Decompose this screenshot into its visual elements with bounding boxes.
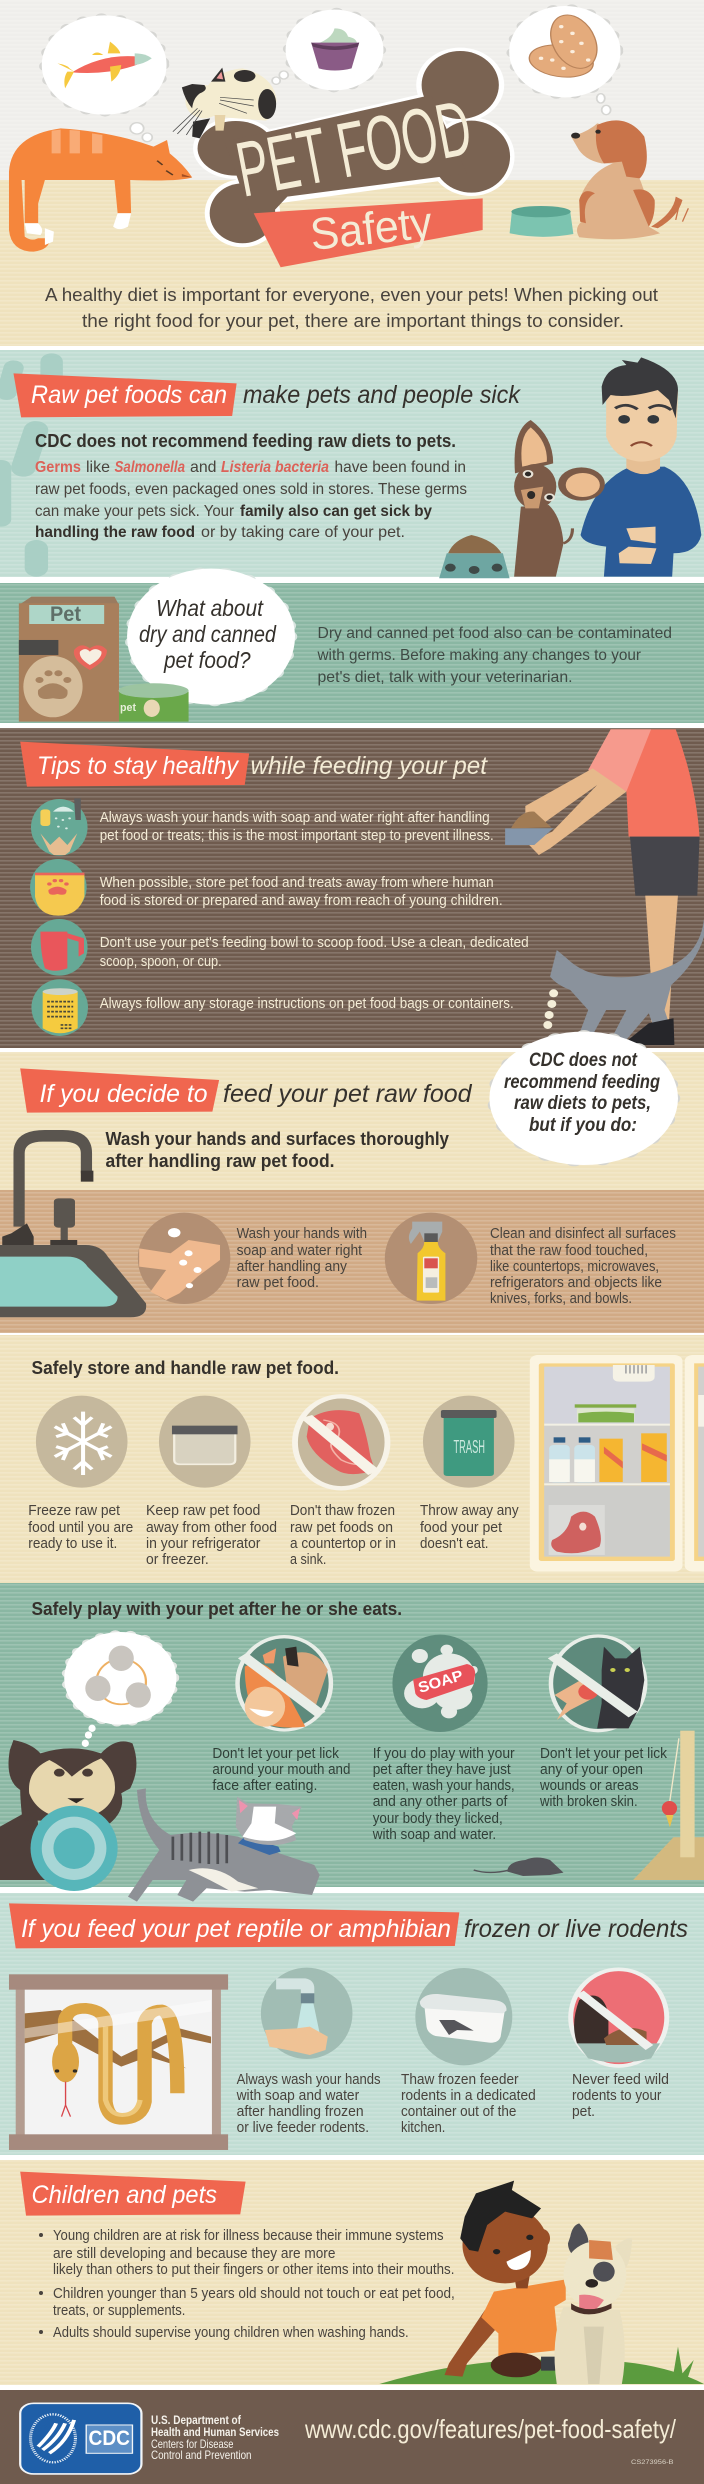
subheading: safely store: Safely store and handle raw pet food.	[32, 1358, 339, 1378]
text block: store tips: Freeze raw pet	[28, 1503, 120, 1519]
icon: soapy hands	[138, 1213, 230, 1304]
icon: faint germs background	[0, 353, 63, 577]
text block: tips: scoop, spoon, or cup.	[100, 953, 222, 970]
icon: CDC HHS logo	[20, 2403, 141, 2474]
publication code: CS273956-B	[631, 2459, 674, 2466]
subheading: wash hands and surfaces	[106, 1129, 449, 1171]
text block: wash hands: soap and water right	[237, 1243, 362, 1259]
text block: agency: Control and Prevention	[151, 2448, 252, 2462]
text block: dry and canned: pet's diet, talk with your veterinarian.	[318, 669, 572, 686]
text block: play tips: eaten, wash your hands,	[373, 1778, 515, 1794]
icon: pet food bag	[19, 597, 119, 722]
intro text: A healthy diet is important for everyone, even your pets! When picking out	[45, 284, 658, 305]
label: trash: TRASH	[454, 1437, 485, 1457]
text block: store tips: ready to use it.	[28, 1536, 117, 1552]
text block: reptile tips: pet.	[572, 2104, 595, 2120]
icon: mouse	[474, 1857, 563, 1876]
callout: CDC does not recommend: but if you do:	[529, 1115, 637, 1136]
text block: reptile tips: rodents in a dedicated	[401, 2088, 536, 2104]
title: PET FOOD	[230, 83, 478, 214]
text block: raw diet warning: Germs	[35, 459, 81, 476]
text block: store tips: a sink.	[290, 1552, 326, 1568]
text block: store tips: food your pet	[420, 1520, 502, 1536]
text block: play tips: wounds or areas	[539, 1778, 638, 1794]
text block: clean surfaces: like countertops, microwaves,	[490, 1259, 659, 1275]
text block: play tips: with soap and water.	[372, 1827, 496, 1843]
text block: store tips: or freezer.	[146, 1552, 209, 1568]
text block: clean surfaces: refrigerators and objects like	[490, 1275, 662, 1291]
heading banner: children and pets	[20, 2172, 246, 2216]
intro text	[45, 284, 658, 331]
icon: kitchen sink	[0, 1130, 146, 1317]
label on bag: Pet	[50, 603, 81, 626]
subheading: wash hands and surfaces: after handling raw pet food.	[106, 1151, 334, 1171]
icon: spray bottle	[385, 1213, 477, 1304]
icon: food storage bin	[30, 859, 87, 916]
text block: children bullets: are still developing and because they are more	[53, 2245, 335, 2262]
heading banner: tips	[20, 742, 488, 787]
text block: reptile tips: rodents to your	[572, 2088, 662, 2104]
heading banner: if you decide	[20, 1068, 473, 1113]
text block: raw diet warning: handling the raw food	[35, 524, 195, 541]
heading banner: reptile or amphibian	[9, 1903, 688, 1948]
icon: snowflake	[36, 1396, 128, 1488]
icon: germs thought bubble	[67, 1634, 173, 1747]
text block: wash hands: raw pet food.	[237, 1275, 319, 1291]
text block: agency	[151, 2413, 279, 2462]
callout: CDC does not recommend	[496, 1037, 671, 1160]
icon: no licking wounds	[548, 1636, 645, 1731]
text block: clean surfaces: Clean and disinfect all surfaces	[490, 1226, 676, 1242]
text block: reptile tips: with soap and water	[236, 2088, 359, 2104]
icon: fish thought bubble	[46, 18, 163, 142]
icon: bone title badge	[193, 48, 515, 267]
heading banner: reptile or amphibian: frozen or live rodents	[464, 1915, 688, 1943]
text block: children bullets	[39, 2227, 455, 2341]
text block: wash hands	[237, 1226, 367, 1291]
text block: reptile tips: container out of the	[401, 2104, 516, 2120]
text block: agency: Centers for Disease	[151, 2437, 234, 2451]
text block: reptile tips: kitchen.	[401, 2120, 445, 2136]
title: Safety	[308, 196, 435, 260]
subheading: safely play: Safely play with your pet after he or she eats.	[32, 1599, 402, 1619]
text block: children bullets: treats, or supplements.	[53, 2302, 185, 2319]
text block: tips: Always wash your hands with soap and water right after handling	[100, 809, 490, 826]
heading banner: reptile or amphibian: If you feed your pet reptile or amphibian	[21, 1915, 451, 1943]
label: soap bar: SOAP	[416, 1667, 465, 1697]
text block: reptile tips: or live feeder rodents.	[237, 2120, 369, 2136]
icon: scratching post	[633, 1731, 704, 1880]
text block: raw diet warning: can make your pets sick. Your	[35, 503, 235, 520]
text block: store tips: raw pet foods on	[290, 1520, 393, 1536]
text block: store tips: doesn't eat.	[420, 1536, 488, 1552]
icon: cupcake bowl thought bubble	[272, 13, 379, 87]
text block: raw diet warning	[35, 430, 467, 541]
text block: children bullets: Adults should supervise young children when washing hands.	[53, 2324, 409, 2341]
icon: person feeding pet	[505, 729, 700, 1022]
heading banner: children and pets: Children and pets	[32, 2181, 217, 2209]
text block: store tips: food until you are	[28, 1520, 133, 1536]
heading banner: raw pet foods: make pets and people sick	[243, 381, 521, 409]
callout: CDC does not recommend: raw diets to pets,	[514, 1093, 651, 1114]
text block: children bullets: Young children are at risk for illness because their immune systems	[53, 2227, 444, 2244]
text block: store tips: a countertop or in	[290, 1536, 396, 1552]
icon: gray cat eating	[543, 918, 704, 1045]
text block: play tips: any of your open	[540, 1762, 643, 1778]
heading banner: if you decide: feed your pet raw food	[223, 1080, 473, 1108]
text block: store tips: Throw away any	[420, 1503, 519, 1519]
icon: food can label	[31, 979, 88, 1036]
text block: tips: Always follow any storage instructions on pet food bags or containers.	[100, 995, 514, 1012]
text block: clean surfaces: knives, forks, and bowls.	[490, 1291, 632, 1307]
text block: raw diet warning: or by taking care of your pet.	[201, 524, 405, 541]
icon: washing hands	[31, 798, 88, 856]
text block: raw diet warning: family also can get sick by	[240, 503, 432, 520]
text block: play tips: with broken skin.	[539, 1794, 638, 1810]
text block: play tips: pet after they have just	[373, 1762, 511, 1778]
text block: store tips: in your refrigerator	[146, 1536, 261, 1552]
text block: tips: Don't use your pet's feeding bowl to scoop food. Use a clean, dedicated	[100, 934, 529, 951]
intro text: the right food for your pet, there are important things to consider.	[82, 310, 624, 331]
text block: reptile tips: Always wash your hands	[237, 2072, 381, 2088]
text block: wash hands: Wash your hands with	[237, 1226, 367, 1242]
icon: sick man	[581, 357, 701, 577]
icon: boy and dog on hill	[379, 2181, 704, 2384]
heading banner: raw pet foods: Raw pet foods can	[31, 381, 227, 409]
icon: snake terrarium	[9, 1974, 228, 2150]
text block: dry and canned: with germs. Before making any changes to your	[317, 647, 642, 664]
icon: cookies thought bubble	[513, 9, 616, 115]
icon: pet food can: pet	[120, 702, 136, 714]
text block: store tips	[28, 1503, 519, 1568]
icon: striped gray cat	[128, 1788, 320, 1902]
text block: reptile tips: after handling frozen	[237, 2104, 364, 2120]
title	[230, 83, 478, 260]
text block: tips	[100, 809, 529, 1012]
icon: trash bin	[423, 1396, 515, 1488]
text block: raw diet warning: like	[86, 459, 110, 476]
text block: raw diet warning: Listeria bacteria	[221, 459, 329, 476]
text block: children bullets: Children younger than 5 years old should not touch or eat pet food,	[53, 2285, 455, 2302]
text block: dry and canned: Dry and canned pet food also can be contaminated	[318, 625, 672, 642]
icon: dog with frisbee	[0, 1740, 136, 1891]
text block: tips: pet food or treats; this is the most important step to prevent illness.	[100, 827, 494, 844]
text block: reptile tips	[236, 2072, 669, 2136]
callout: dry and canned question: dry and canned	[139, 621, 277, 647]
text block: raw diet warning: and	[190, 459, 216, 476]
text block: reptile tips: Thaw frozen feeder	[401, 2072, 519, 2088]
text block: play tips: If you do play with your	[373, 1746, 515, 1762]
text block: play tips: your body they licked,	[373, 1811, 503, 1827]
text block: play tips: and any other parts of	[373, 1794, 508, 1810]
text block: agency: Health and Human Services	[151, 2425, 279, 2439]
icon: sleeping orange cat	[9, 128, 192, 252]
callout: CDC does not recommend: CDC does not	[529, 1050, 638, 1071]
text block: children bullets: likely than others to put their fingers or other items into their mouths.	[53, 2261, 454, 2278]
heading banner: tips: Tips to stay healthy	[37, 752, 239, 780]
callout: dry and canned question	[132, 573, 290, 701]
text block: clean surfaces	[490, 1226, 676, 1307]
text block: store tips: away from other food	[146, 1520, 277, 1536]
callout: dry and canned question: What about	[156, 595, 264, 621]
icon: no licking face	[238, 1637, 331, 1730]
icon: pet food can	[119, 683, 189, 722]
text block: tips: food is stored or prepared and away from reach of young children.	[100, 892, 503, 909]
text block: reptile tips: Never feed wild	[572, 2072, 669, 2088]
icon: hand washing under tap	[261, 1968, 352, 2059]
text block: tips: When possible, store pet food and treats away from where human	[100, 874, 494, 891]
icon: rodent container	[415, 1968, 512, 2065]
icon: brown dog with bowl	[510, 120, 688, 239]
subheading: wash hands and surfaces: Wash your hands and surfaces thoroughly	[106, 1129, 449, 1149]
text block: store tips: Don't thaw frozen	[290, 1503, 395, 1519]
text block: play tips: Don't let your pet lick	[212, 1746, 340, 1762]
text block: raw diet warning: raw pet foods, even packaged ones sold in stores. These germs	[35, 481, 467, 498]
icon: no wild rodents	[571, 1969, 667, 2066]
text block: play tips: around your mouth and	[212, 1762, 350, 1778]
text block: raw diet warning: Salmonella	[114, 459, 185, 476]
text block: store tips: Keep raw pet food	[146, 1503, 260, 1519]
callout: dry and canned question: pet food?	[163, 647, 251, 673]
heading banner: if you decide: If you decide to	[40, 1080, 208, 1108]
icon: CDC HHS logo: CDC	[88, 2427, 130, 2450]
text block: dry and canned	[317, 625, 672, 686]
text block: play tips: face after eating.	[212, 1778, 317, 1794]
text block: raw diet warning: CDC does not recommend feeding raw diets to pets.	[35, 430, 456, 451]
icon: soap	[392, 1635, 488, 1732]
text block: raw diet warning: have been found in	[334, 459, 466, 476]
text block: play tips	[212, 1746, 668, 1843]
icon: food scoop	[31, 919, 88, 976]
text block: clean surfaces: that the raw food touched,	[490, 1243, 648, 1259]
text block: play tips: Don't let your pet lick	[540, 1746, 668, 1762]
heading banner: tips: while feeding your pet	[250, 752, 488, 780]
callout: CDC does not recommend: recommend feeding	[504, 1072, 660, 1093]
icon: sealed container	[159, 1396, 251, 1488]
icon: black and white cat on bone	[173, 68, 277, 138]
heading banner: raw pet foods	[13, 373, 521, 417]
text block: agency: U.S. Department of	[151, 2413, 242, 2427]
icon: refrigerator	[530, 1355, 704, 1572]
text block: wash hands: after handling any	[237, 1259, 348, 1275]
icon: chihuahua with food bowl	[439, 420, 605, 578]
icon: no thawing meat	[295, 1396, 387, 1488]
